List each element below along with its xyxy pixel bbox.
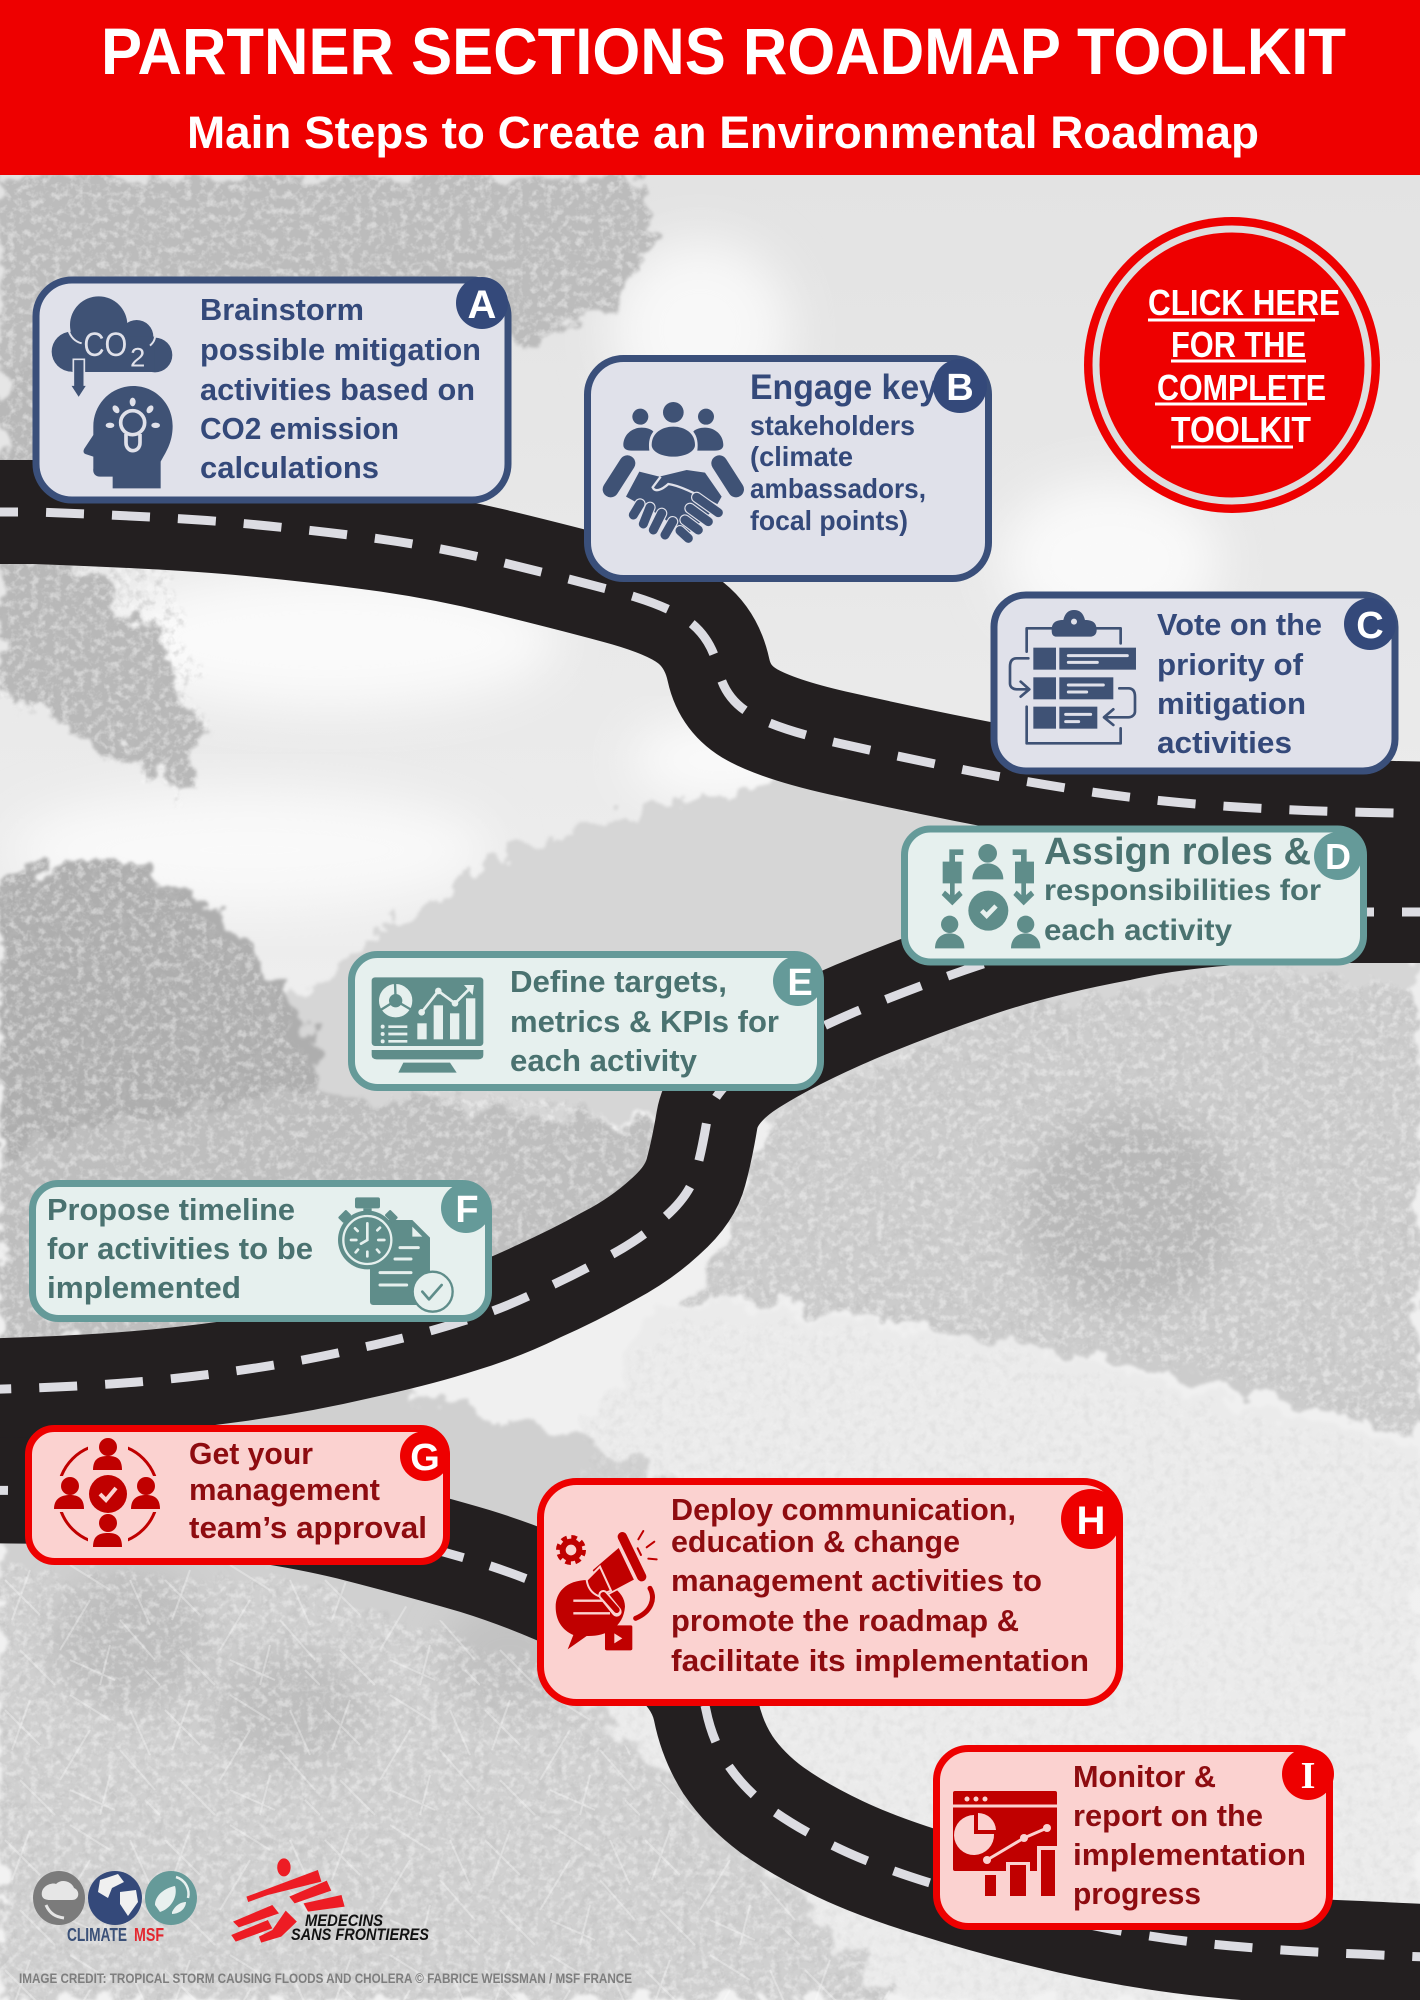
badge: G: G — [410, 1437, 440, 1479]
button: click here for the complete toolkit: COMPLETE — [1157, 367, 1326, 408]
logo: Climate MSF: MSF — [134, 1925, 164, 1945]
text: step H — [671, 1492, 1089, 1678]
text: step F: Propose timeline — [47, 1192, 295, 1227]
text: step C: activities — [1157, 725, 1292, 760]
badge: H — [1061, 1489, 1121, 1549]
badge: D — [1314, 832, 1362, 880]
panel: step A — [36, 277, 508, 500]
panel: step G — [28, 1428, 450, 1562]
badge: G — [400, 1431, 450, 1481]
panel: step H — [540, 1482, 1121, 1702]
logo: Climate MSF: CLIMATE — [67, 1925, 127, 1945]
logo: Medecins Sans Frontieres: SANS FRONTIERES — [291, 1925, 430, 1944]
text: step I: Monitor & — [1073, 1759, 1216, 1794]
text: step A: activities based on — [200, 372, 475, 407]
icon: assign roles people — [935, 844, 1040, 948]
title: PARTNER SECTIONS ROADMAP TOOLKIT — [101, 14, 1346, 88]
button: click here for the complete toolkit — [1084, 217, 1380, 513]
badge: F: F — [455, 1189, 479, 1231]
badge: H: H — [1077, 1499, 1105, 1543]
icon: stopwatch and document — [338, 1197, 453, 1312]
logo: Medecins Sans Frontieres: MEDECINS — [305, 1911, 384, 1930]
text: step A: calculations — [200, 450, 379, 485]
text: step A: Brainstorm — [200, 292, 364, 327]
text: step C: priority of — [1157, 647, 1304, 682]
text: step G: management — [189, 1472, 380, 1507]
text: step H: Deploy communication, — [671, 1492, 1016, 1527]
text: step G — [189, 1436, 427, 1545]
panel: step E — [352, 954, 823, 1088]
text: step B: Engage key — [750, 368, 939, 407]
panel: step B — [588, 358, 988, 578]
badge: F — [441, 1183, 491, 1233]
text: step E — [510, 964, 779, 1078]
road: upper section — [0, 512, 1420, 814]
image credit: IMAGE CREDIT: TROPICAL STORM CAUSING FLOODS AND CHOLERA © FABRICE WEISSMAN / MSF FRANCE — [19, 1970, 632, 1986]
text: step F: implemented — [47, 1270, 241, 1305]
icon: team handshake — [611, 402, 736, 538]
text: step A: possible mitigation — [200, 332, 481, 367]
icon: management team approval — [50, 1438, 166, 1550]
text: step F — [47, 1192, 313, 1305]
text: step E: metrics & KPIs for — [510, 1004, 779, 1039]
text: step C: Vote on the — [1157, 607, 1322, 642]
text: step E: each activity — [510, 1043, 698, 1078]
text: step A: CO2 emission — [200, 411, 399, 446]
text: step G: Get your — [189, 1436, 313, 1471]
icon: CO2 cloud and head with lightbulb: CO — [83, 326, 127, 364]
button: click here for the complete toolkit: CLICK HERE — [1148, 282, 1340, 323]
badge: B: B — [946, 367, 974, 409]
badge: C: C — [1356, 605, 1384, 647]
header band — [0, 0, 1420, 175]
text: step D: responsibilities for — [1044, 874, 1321, 907]
text: step I — [1073, 1759, 1306, 1911]
text: step I: implementation — [1073, 1837, 1306, 1872]
panel: step D — [904, 829, 1364, 962]
badge: E — [773, 956, 823, 1006]
icon: monitor with charts — [372, 977, 483, 1073]
text: step H: education & change — [671, 1524, 960, 1559]
badge: E: E — [787, 962, 813, 1004]
text: step H: promote the roadmap & — [671, 1603, 1019, 1638]
button: click here for the complete toolkit: FOR THE — [1171, 324, 1306, 365]
text: step D — [1044, 831, 1321, 947]
icon: megaphone and communication — [556, 1531, 657, 1650]
text: step C: mitigation — [1157, 686, 1306, 721]
text: step A — [200, 292, 481, 485]
button: click here for the complete toolkit: TOOLKIT — [1171, 409, 1311, 450]
panel: step C — [994, 595, 1396, 771]
badge: B — [933, 359, 987, 413]
text: step C — [1157, 607, 1322, 760]
text: step I: report on the — [1073, 1798, 1263, 1833]
panel: step F — [32, 1183, 491, 1318]
text: step F: for activities to be — [47, 1231, 313, 1266]
text: step D: Assign roles & — [1044, 831, 1311, 873]
text: step I: progress — [1073, 1876, 1201, 1911]
icon: monitoring dashboard — [953, 1791, 1059, 1898]
badge: I — [1282, 1748, 1334, 1800]
subtitle: Main Steps to Create an Environmental Roadmap — [187, 107, 1259, 158]
panel: step I — [936, 1748, 1334, 1926]
text: step B: (climate — [750, 441, 853, 472]
logo: Medecins Sans Frontieres — [231, 1858, 430, 1944]
badge: I: I — [1301, 1755, 1315, 1797]
road: lower section — [0, 1490, 1420, 1958]
text: step B: focal points) — [750, 505, 908, 536]
text: step B — [750, 368, 939, 536]
text: step H: facilitate its implementation — [671, 1643, 1089, 1678]
road: middle section — [0, 912, 1420, 1390]
icon: CO2 cloud and head with lightbulb — [52, 296, 173, 488]
badge: A: A — [468, 283, 496, 327]
badge: D: D — [1325, 836, 1351, 877]
text: step B: stakeholders — [750, 410, 915, 441]
logo: Climate MSF — [33, 1871, 197, 1945]
text: step G: team’s approval — [189, 1510, 427, 1545]
badge: A — [456, 277, 508, 329]
icon: CO2 cloud and head with lightbulb: 2 — [130, 343, 145, 373]
text: step B: ambassadors, — [750, 473, 926, 504]
text: step H: management activities to — [671, 1563, 1042, 1598]
icon: clipboard priority list — [1010, 610, 1136, 743]
badge: C — [1344, 598, 1396, 650]
text: step D: each activity — [1044, 914, 1232, 947]
text: step E: Define targets, — [510, 964, 727, 999]
